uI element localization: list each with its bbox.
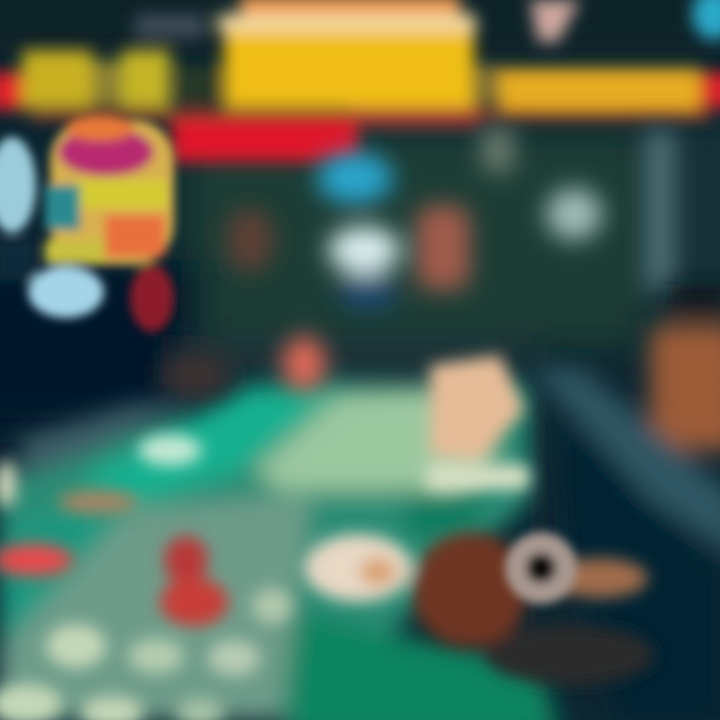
top details — [135, 14, 205, 38]
panel: signage band — [0, 0, 720, 162]
red stripe — [0, 72, 26, 110]
panel: rainbow balloon — [0, 115, 174, 332]
left yellow sign — [22, 50, 92, 108]
icon: round ring with dark centre — [505, 532, 577, 604]
panel: green gaming table — [0, 380, 560, 720]
centre yellow sign — [224, 22, 474, 108]
panel: wall lights and objects — [159, 128, 675, 397]
right yellow sign — [500, 68, 700, 110]
panel: right side seating — [530, 285, 720, 720]
panel: table chips and markers — [0, 434, 292, 720]
panel: dealer hands and chips — [304, 355, 655, 685]
